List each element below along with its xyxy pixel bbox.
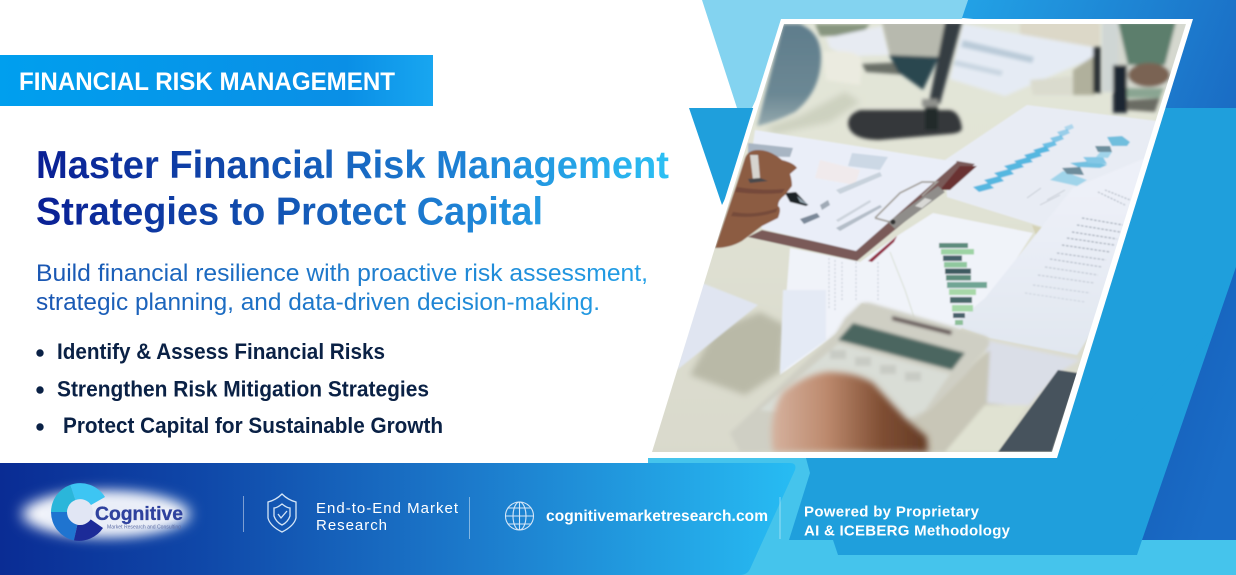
photo: shoulder and background: [815, 22, 1100, 85]
subtitle: strategic planning, and data-driven decision-making.: [36, 289, 600, 316]
powered by text: AI & ICEBERG Methodology: [804, 522, 1011, 540]
photo: plant: [1102, 22, 1188, 113]
feature: end-to-end research: End-to-End Market: [316, 500, 459, 517]
bullet list: Strengthen Risk Mitigation Strategies: [57, 376, 429, 402]
photo: right side papers under calculator: [911, 341, 1078, 452]
logo: Cognitive: [22, 483, 190, 541]
photo: lower left paper: [677, 283, 826, 373]
photo: desk shadow lower left: [690, 312, 785, 395]
photo: chart paper right: [945, 105, 1165, 238]
photo: top papers: [950, 24, 1101, 96]
photo: blurred hand on calculator: [772, 372, 928, 452]
divider lines: [244, 496, 780, 539]
photo: calculator: [730, 302, 989, 452]
bullet list: [36, 339, 443, 438]
photo: bar chart on paper: [939, 243, 987, 325]
bottom band: [0, 463, 795, 575]
subtitle: [36, 260, 648, 316]
website url: cognitivemarketresearch.com: [546, 508, 768, 525]
powered by text: [804, 504, 1011, 540]
photo frame: [644, 19, 1193, 458]
feature: end-to-end research: [316, 500, 459, 534]
icon: shield: [268, 494, 296, 532]
ribbon heading: FINANCIAL RISK MANAGEMENT: [19, 68, 395, 96]
ribbon heading: [0, 55, 433, 106]
logo: Cognitive: Cognitive: [95, 504, 183, 525]
logo: Cognitive: Market Research and Consulting: [107, 524, 181, 530]
photo: paper with rows of figures: [957, 172, 1140, 356]
powered by text: Powered by Proprietary: [804, 504, 980, 520]
bullet list: Identify & Assess Financial Risks: [57, 339, 385, 364]
photo: dark folder: [998, 370, 1078, 452]
photo: desk shadow near shoulder: [765, 92, 860, 134]
photo: shoulder: [757, 24, 821, 126]
title: Strategies to Protect Capital: [36, 190, 543, 234]
bullet list: Protect Capital for Sustainable Growth: [63, 413, 443, 438]
photo: phone stand: [848, 22, 962, 140]
title: [36, 144, 669, 234]
icon: globe: [506, 502, 534, 530]
photo: clipboard with paper: [748, 130, 977, 262]
title: Master Financial Risk Management: [36, 144, 669, 187]
photo: desk with financial documents: [640, 20, 1200, 460]
photo: lower paper with bar chart: [780, 213, 1033, 375]
feature: end-to-end research: Research: [316, 517, 387, 534]
subtitle: Build financial resilience with proactive risk assessment,: [36, 260, 648, 287]
photo: hand with pen: [715, 150, 809, 248]
